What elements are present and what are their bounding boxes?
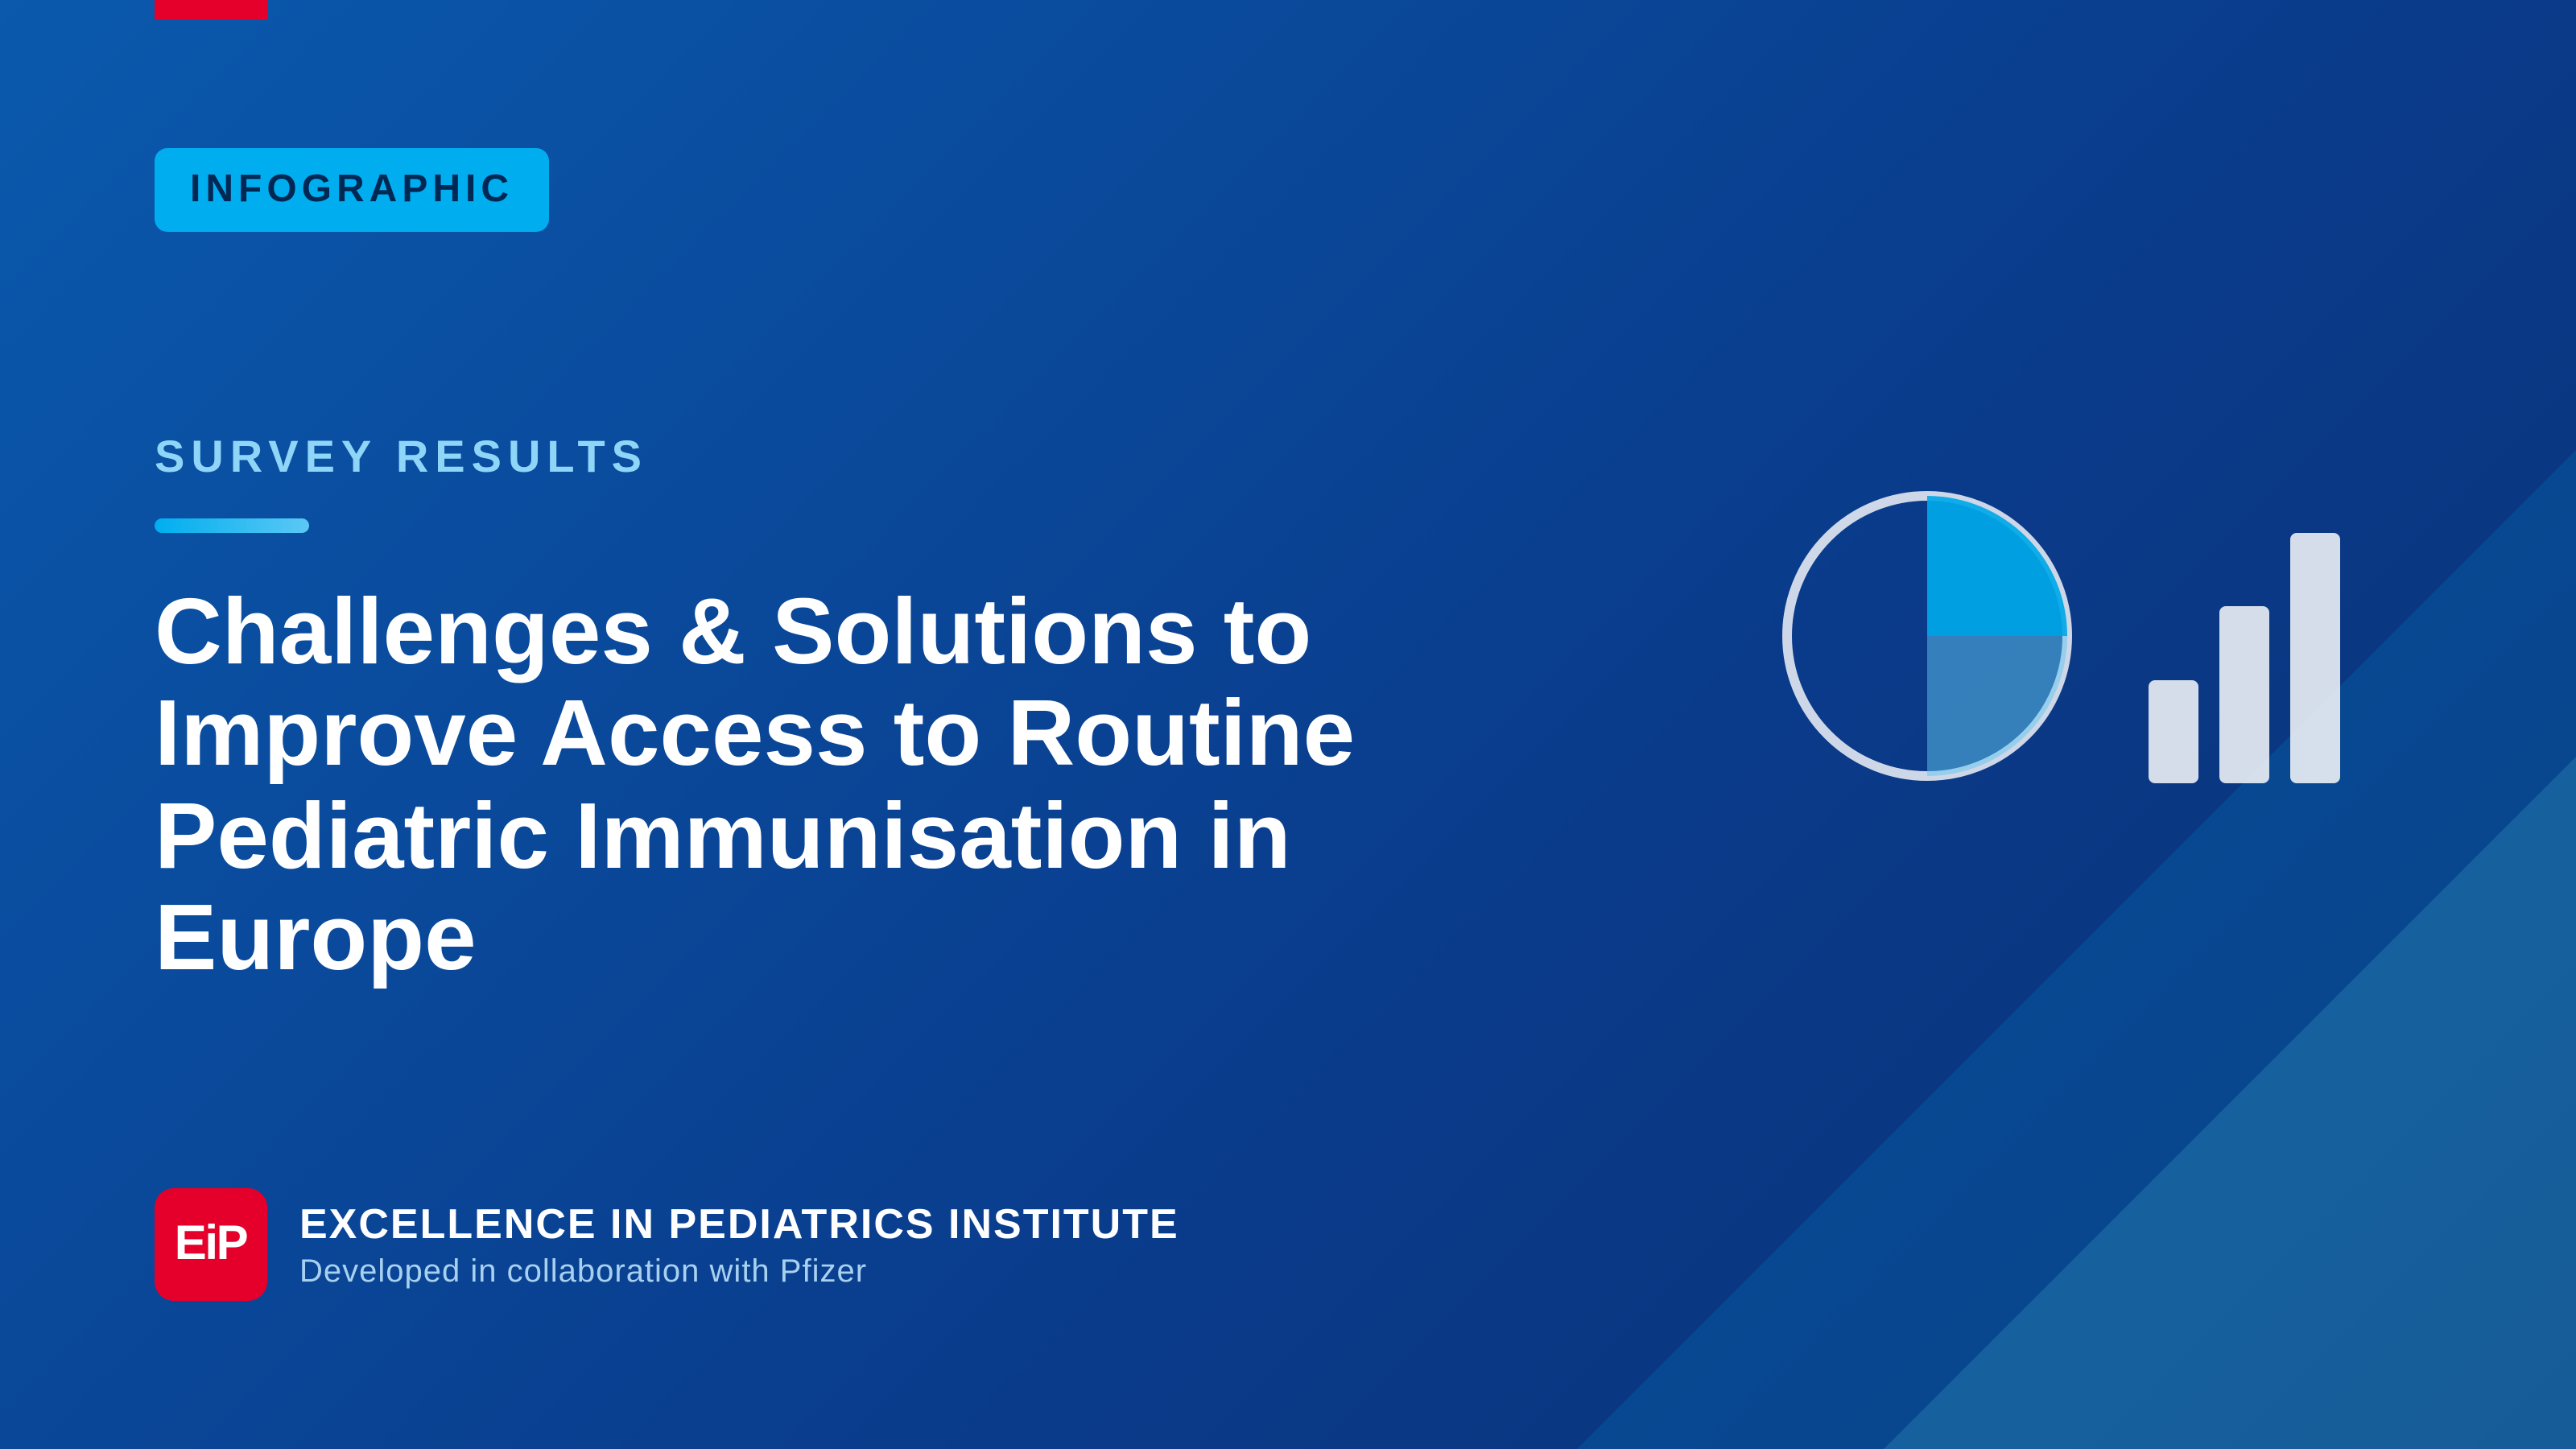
icon: pie chart	[1787, 496, 2067, 776]
organisation name: EXCELLENCE IN PEDIATRICS INSTITUTE	[299, 1201, 1179, 1248]
background shape: small diagonal triangle	[1884, 757, 2576, 1449]
accent bar	[155, 518, 309, 533]
badge: infographic	[155, 148, 549, 232]
badge: infographic: INFOGRAPHIC	[190, 167, 514, 210]
collaboration line: Developed in collaboration with Pfizer	[299, 1253, 867, 1289]
title: Improve Access to Routine	[155, 680, 1355, 785]
title: Challenges & Solutions to	[155, 579, 1311, 683]
title: Europe	[155, 885, 477, 989]
icon: bar chart	[2149, 533, 2340, 783]
logo: EiP	[155, 1188, 267, 1301]
title: Pediatric Immunisation in	[155, 783, 1291, 888]
top red tab	[155, 0, 267, 19]
eyebrow: survey results: SURVEY RESULTS	[155, 431, 648, 481]
logo: EiP: EiP	[175, 1216, 247, 1269]
title	[155, 579, 1355, 989]
background shape: large diagonal triangle	[1577, 450, 2576, 1449]
